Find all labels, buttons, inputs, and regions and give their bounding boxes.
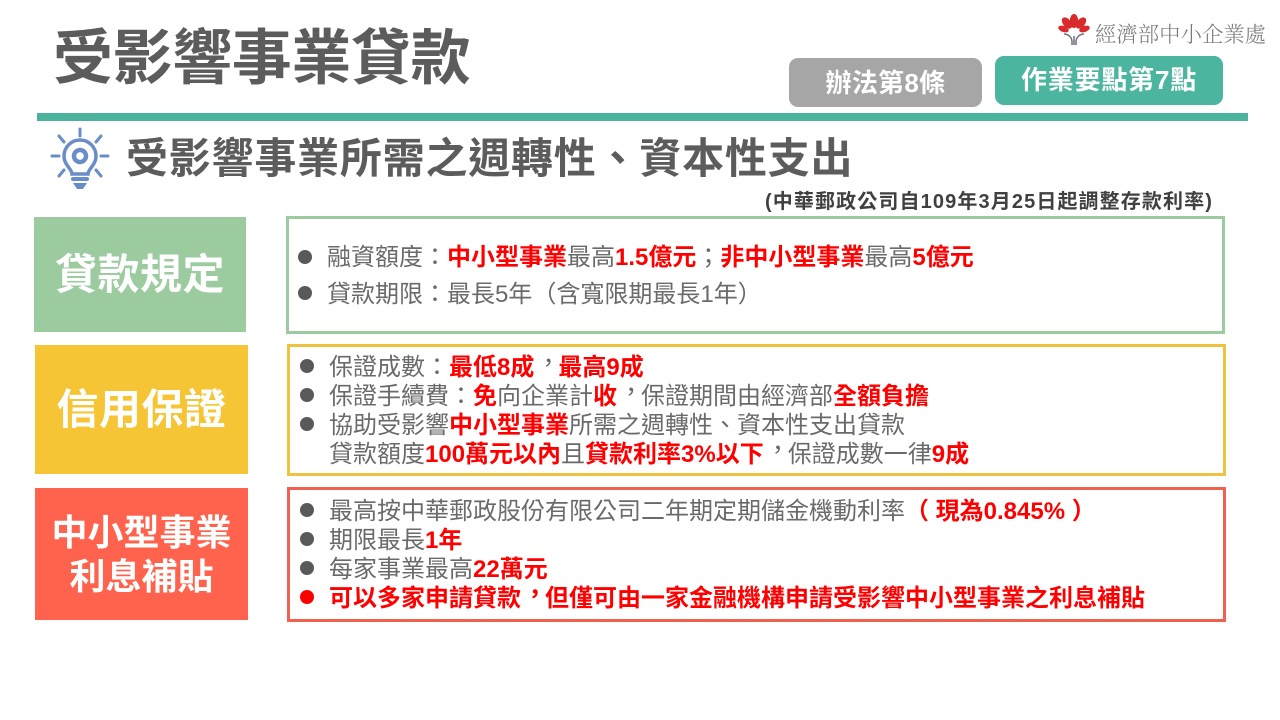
label background: SME interest subsidy — [35, 488, 248, 620]
item: assistance for SMEs: 協助受影響中小型事業所需之週轉性、資本性支出貸款 — [329, 412, 905, 439]
tag: regulation article: 辦法第8條 — [826, 68, 945, 98]
item: financing limit: 融資額度：中小型事業最高1.5億元；非中小型事業最高5億元 — [327, 244, 974, 271]
item: single bank restriction: 可以多家申請貸款 但僅可由一家金融機構申請受影響中小型事業之利息補貼 — [329, 585, 1145, 612]
label: SME interest subsidy: 利息補貼 — [69, 556, 214, 597]
item: loan term: 貸款期限：最長5年（含寬限期最長1年） — [327, 281, 762, 308]
label: SME interest subsidy — [51, 512, 232, 597]
tag: guideline point — [995, 56, 1223, 105]
panel: SME interest subsidy — [287, 487, 1226, 622]
panel: loan rules — [286, 216, 1225, 334]
subtitle: 受影響事業所需之週轉性、資本性支出 — [126, 135, 853, 182]
item: guarantee fee: ， — [619, 379, 643, 406]
tag: guideline point: 作業要點第7點 — [1021, 65, 1197, 95]
tag: regulation article — [789, 58, 982, 107]
item: cap per business: 每家事業最高22萬元 — [329, 556, 548, 583]
label: SME interest subsidy: 中小型事業 — [51, 512, 232, 553]
item: single bank restriction: ， — [523, 581, 547, 608]
label background: loan rules — [34, 217, 246, 332]
icon: light bulb with gear — [50, 128, 110, 189]
note: postal rate adjustment: (中華郵政公司自109年3月25日起調整存款利率) — [765, 191, 1213, 213]
item: term: 期限最長1年 — [329, 527, 462, 554]
header rule — [37, 113, 1248, 121]
item: loan amount condition: ， — [766, 437, 790, 464]
label: credit guarantee: 信用保證 — [56, 386, 226, 433]
logo text: 經濟部中小企業處 — [1095, 23, 1266, 47]
title: 受影響事業貸款 — [53, 25, 470, 92]
item: interest rate: 最高按中華郵政股份有限公司二年期定期儲金機動利率（ 現為0.845% ） — [329, 498, 1096, 525]
panel: credit guarantee — [287, 344, 1226, 476]
logo: SMEA — [1058, 14, 1266, 47]
item: guarantee fee: 保證手續費：免向企業計收 保證期間由經濟部全額負擔 — [329, 383, 929, 410]
item: guarantee ratio: 保證成數：最低8成 最高9成 — [329, 354, 644, 381]
item: loan amount condition: 貸款額度100萬元以內且貸款利率3%以下 保證成數一律9成 — [329, 441, 969, 468]
icon: logo flower — [1058, 14, 1090, 45]
label: loan rules: 貸款規定 — [55, 251, 225, 298]
item: guarantee ratio: ， — [536, 350, 560, 377]
label background: credit guarantee — [35, 345, 248, 474]
